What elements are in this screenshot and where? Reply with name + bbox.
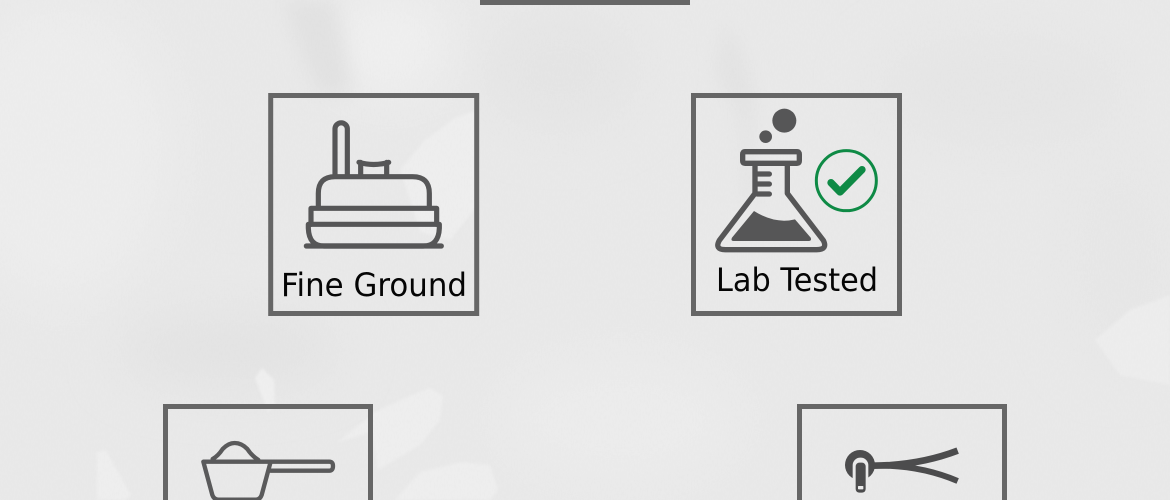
icon: scoop (203, 443, 333, 500)
panel frame (271, 96, 477, 314)
top box: cropped panel edge (480, 0, 690, 5)
panel frame (166, 406, 370, 500)
panel: Fine Ground (271, 96, 477, 314)
icon: green check badge (816, 151, 876, 211)
icon: forked key (845, 450, 958, 495)
panel frame (694, 96, 900, 314)
panel: measuring scoop (cropped) (166, 406, 370, 500)
panel frame (800, 406, 1004, 500)
panel: Lab Tested (694, 96, 900, 314)
panel: tool with forked tail (cropped) (800, 406, 1004, 500)
icon: flask (718, 109, 825, 250)
icon: grinder (306, 123, 441, 246)
label: Lab Tested: Lab Tested (716, 261, 878, 299)
label: Fine Ground: Fine Ground (281, 266, 467, 304)
